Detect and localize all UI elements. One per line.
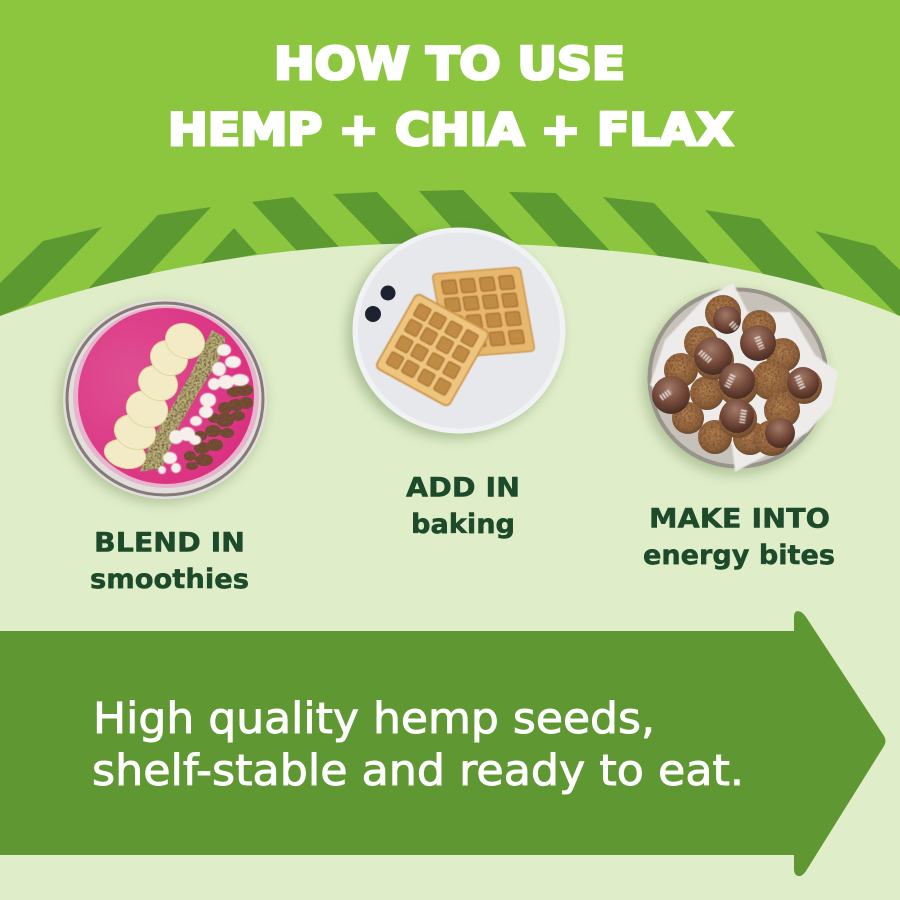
label: blend in smoothies: smoothies <box>90 564 249 595</box>
arrow banner <box>0 611 886 876</box>
cacao nibs <box>184 384 253 470</box>
arrow text <box>92 694 744 796</box>
banana slices <box>101 317 210 473</box>
coconut flakes <box>158 344 249 474</box>
back waffle <box>432 267 535 358</box>
label: add in baking: baking <box>411 509 515 540</box>
arrow text: shelf-stable and ready to eat. <box>92 746 744 796</box>
photo: waffles on a plate <box>347 228 566 438</box>
label: blend in smoothies <box>90 528 249 595</box>
photo: smoothie bowl <box>59 299 267 503</box>
pale green panel <box>0 243 900 900</box>
title <box>168 39 733 156</box>
photo: energy bites <box>643 283 838 475</box>
label: add in baking: ADD IN <box>406 472 520 504</box>
front waffle <box>375 293 490 407</box>
label: make into energy bites: energy bites <box>643 540 835 571</box>
label: make into energy bites: MAKE INTO <box>649 504 830 534</box>
sea salt flakes <box>661 323 803 423</box>
title: HEMP + CHIA + FLAX <box>168 105 733 156</box>
nut coated bites <box>664 295 822 456</box>
chocolate dipped bites <box>652 306 819 448</box>
diagonal stripes <box>0 190 900 318</box>
label: make into energy bites <box>643 504 835 571</box>
arrow text: High quality hemp seeds, <box>93 694 655 744</box>
blueberries <box>365 286 396 322</box>
title: HOW TO USE <box>274 39 625 90</box>
parchment paper <box>650 283 838 472</box>
label: add in baking <box>406 472 520 540</box>
hemp seed strip <box>140 330 226 472</box>
label: blend in smoothies: BLEND IN <box>94 528 245 558</box>
